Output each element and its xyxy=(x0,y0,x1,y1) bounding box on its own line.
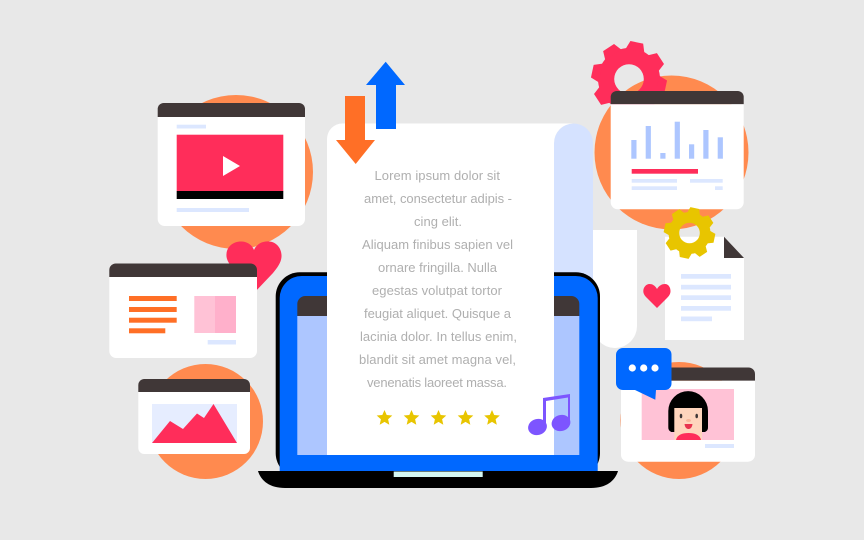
icon: play button xyxy=(223,156,240,176)
icon: red gear xyxy=(590,40,668,118)
text block: egestas volutpat tortor xyxy=(372,283,503,298)
icon: chat bubble xyxy=(616,348,672,400)
text block: blandit sit amet magna vel, xyxy=(359,352,516,367)
text block: cing elit. xyxy=(414,214,462,229)
arrow: blue up xyxy=(366,62,405,129)
bar chart xyxy=(631,122,723,159)
star rating xyxy=(377,410,500,425)
text block xyxy=(359,168,517,390)
text block: ornare fringilla. Nulla xyxy=(378,260,498,275)
orange circle behind mountain window xyxy=(148,364,263,479)
text block: amet, consectetur adipis - xyxy=(364,191,512,206)
window: text and image layout xyxy=(109,264,257,358)
text block: feugiat aliquet. Quisque a xyxy=(364,306,512,321)
window: mountain chart xyxy=(138,379,250,454)
girl portrait xyxy=(668,391,708,440)
icon: yellow gear xyxy=(663,207,716,259)
document page xyxy=(327,124,573,455)
window: video player xyxy=(158,103,305,226)
orange circle behind video window xyxy=(159,95,313,249)
orange circle behind portrait window xyxy=(620,362,738,479)
window: bar chart xyxy=(611,91,744,209)
text block: lacinia dolor. In tellus enim, xyxy=(360,329,517,344)
window: portrait xyxy=(621,368,755,462)
laptop xyxy=(258,272,618,488)
arrow: orange down xyxy=(336,96,375,164)
document roll xyxy=(554,124,593,340)
document icon xyxy=(665,237,744,340)
white flap of document xyxy=(590,230,637,348)
text block: venenatis laoreet massa. xyxy=(367,375,507,390)
orange circle behind chart window xyxy=(594,76,748,230)
icon: music notes xyxy=(526,394,572,437)
laptop screen xyxy=(297,316,579,455)
text block: Lorem ipsum dolor sit xyxy=(374,168,500,183)
laptop base xyxy=(258,471,618,488)
icon: large heart xyxy=(226,241,282,293)
icon: small heart xyxy=(643,284,670,308)
video frame xyxy=(177,135,283,191)
text block: Aliquam finibus sapien vel xyxy=(362,237,513,252)
